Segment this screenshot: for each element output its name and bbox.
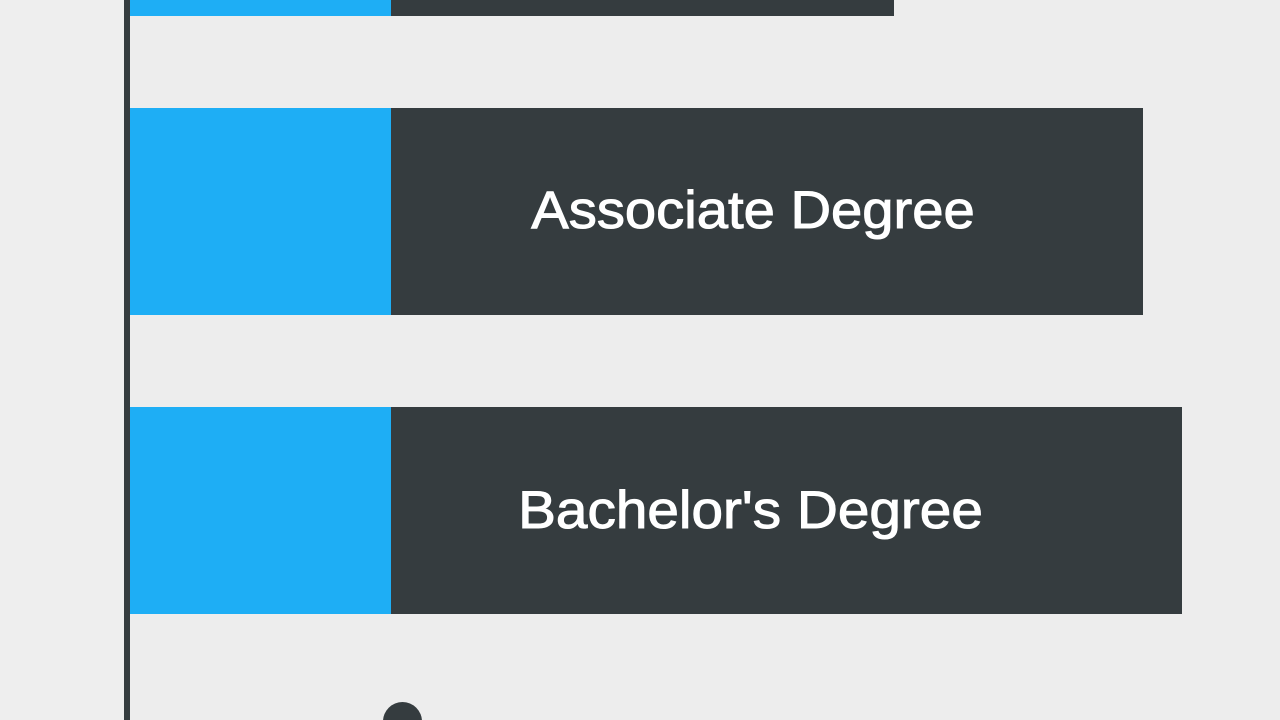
vertical axis line <box>124 0 130 720</box>
top bar blue segment <box>130 0 391 16</box>
bar: Associate Degree <box>130 108 1143 315</box>
Associate Degree blue segment <box>130 108 391 315</box>
left margin strip <box>0 0 124 720</box>
Bachelor's Degree dark segment <box>391 407 1182 614</box>
bar: top cropped <box>130 0 894 16</box>
icon: cropped dark circle <box>383 702 422 720</box>
Associate Degree dark segment <box>391 108 1143 315</box>
top bar dark segment <box>391 0 894 16</box>
Bachelor's Degree label: Bachelor's Degree <box>518 481 983 540</box>
Associate Degree label: Associate Degree <box>531 181 975 240</box>
bar: Bachelor's Degree <box>130 407 1182 614</box>
Bachelor's Degree blue segment <box>130 407 391 614</box>
